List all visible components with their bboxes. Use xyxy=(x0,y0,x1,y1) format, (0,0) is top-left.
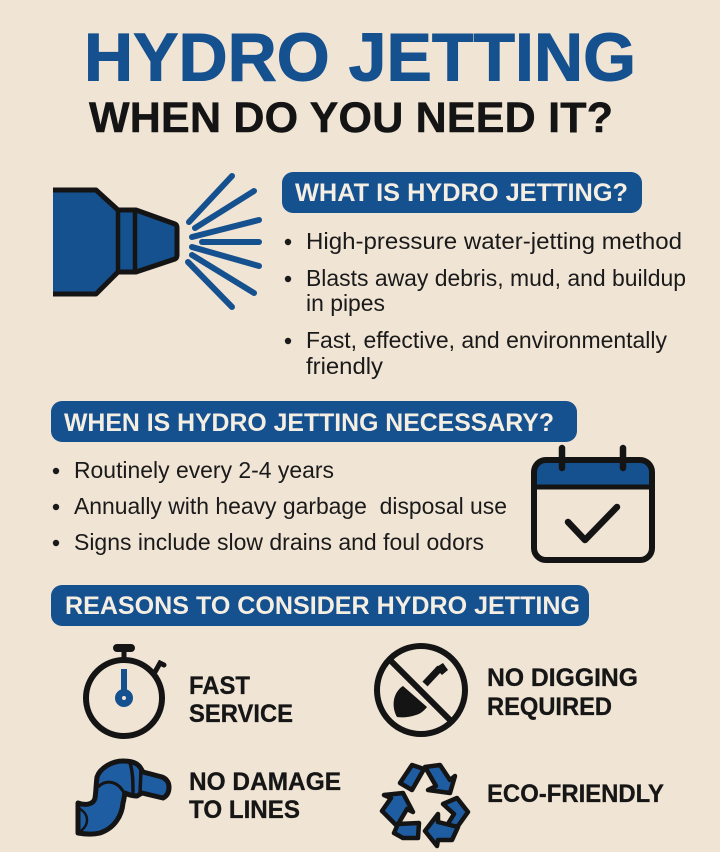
panel: reasons to consider xyxy=(51,585,664,846)
heading: when necessary xyxy=(51,401,577,442)
label: eco-friendly: ECO-FRIENDLY xyxy=(487,780,664,808)
icon: calendar with check xyxy=(534,448,652,560)
reason: eco-friendly xyxy=(382,765,664,846)
heading: when necessary: WHEN IS HYDRO JETTING NECESSARY? xyxy=(64,409,554,437)
label: fast service: FAST xyxy=(189,672,250,700)
panel: when is hydro jetting necessary xyxy=(51,401,652,560)
icon: blue pipe xyxy=(78,761,169,834)
bullet list: definition: in pipes xyxy=(306,290,385,316)
bullet list: timing: Signs include slow drains and foul odors xyxy=(74,529,484,555)
icon: water jet nozzle xyxy=(53,176,259,307)
reason: no digging required xyxy=(377,646,638,734)
bullet list: timing xyxy=(53,457,507,555)
reason: no damage to lines xyxy=(78,761,341,834)
bullet list: definition: High-pressure water-jetting method xyxy=(306,228,682,254)
bullet list: timing: Routinely every 2-4 years xyxy=(74,457,334,483)
heading: what is hydro jetting: WHAT IS HYDRO JETTING? xyxy=(295,179,628,207)
label: no digging required: NO DIGGING xyxy=(487,664,638,692)
reason: no damage to lines: TO LINES xyxy=(189,796,300,824)
reason: fast service xyxy=(86,648,293,736)
title: WHEN DO YOU NEED IT? xyxy=(89,94,613,142)
heading: reasons: REASONS TO CONSIDER HYDRO JETTING xyxy=(65,592,580,620)
bullet list: definition xyxy=(285,228,686,379)
bullet list: timing: Annually with heavy garbage disposal use xyxy=(74,493,507,519)
icon: recycle xyxy=(382,765,468,846)
bullet list: definition: Blasts away debris, mud, and buildup xyxy=(306,265,686,291)
title xyxy=(84,20,636,142)
reason: fast service: SERVICE xyxy=(189,700,293,728)
icon: stopwatch xyxy=(86,648,164,736)
reason: no digging required: REQUIRED xyxy=(487,693,612,721)
label: no damage to lines: NO DAMAGE xyxy=(189,768,341,796)
icon: no shovel xyxy=(377,646,465,734)
bullet list: definition: friendly xyxy=(306,353,384,379)
title: HYDRO JETTING xyxy=(84,20,636,96)
heading: what is hydro jetting xyxy=(282,172,642,213)
panel: what is hydro jetting xyxy=(282,172,686,379)
bullet list: definition: Fast, effective, and environmentally xyxy=(306,327,667,353)
heading: reasons xyxy=(51,585,589,626)
